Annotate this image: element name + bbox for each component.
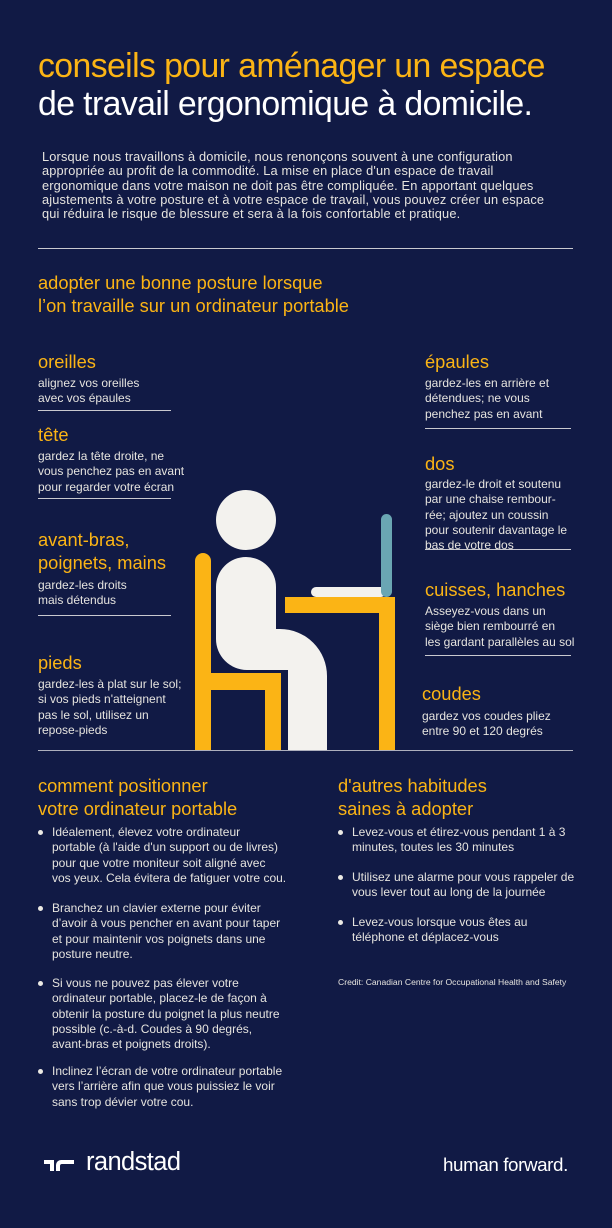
label: épaules: penchez pas en avant (425, 407, 542, 421)
label: oreilles (38, 350, 171, 411)
bullets: laptop: Inclinez l’écran de votre ordinateur portable (52, 1064, 282, 1078)
label: oreilles: oreilles (38, 351, 96, 372)
bullets: laptop: vers l’arrière afin que vous puissiez le voir (52, 1079, 275, 1093)
bullets: laptop: obtenir la posture du poignet la plus neutre (52, 1007, 280, 1021)
bullets: laptop: posture neutre. (52, 947, 133, 961)
bullets: habits: Utilisez une alarme pour vous rappeler de (352, 870, 574, 884)
bullets: habits: Levez-vous et étirez-vous pendant 1 à 3 (352, 825, 565, 839)
intro text (42, 149, 544, 221)
label: dos: pour soutenir davantage le (425, 523, 567, 537)
section heading: habits: d'autres habitudes (338, 775, 487, 796)
bullets: laptop: et pour maintenir vos poignets dans une (52, 932, 265, 946)
label: avant-bras: poignets, mains (38, 552, 166, 573)
label: tête: gardez la tête droite, ne (38, 449, 164, 463)
intro text: ergonomique dans votre maison ne doit pas être compliquée. En apportant quelques (42, 178, 533, 193)
tagline: human forward. (443, 1154, 568, 1175)
bullets: laptop: sans trop dévier votre cou. (52, 1095, 193, 1109)
bullets: habits (338, 825, 574, 944)
section heading: posture: adopter une bonne posture lorsque (38, 272, 323, 293)
label: dos: rée; ajoutez un coussin (425, 508, 548, 522)
logo: randstad: randstad (86, 1148, 180, 1176)
bullets: laptop: Branchez un clavier externe pour éviter (52, 901, 261, 915)
bullets: laptop: possible (c.-à-d. Coudes à 90 degrés, (52, 1022, 252, 1036)
intro text: qui réduira le risque de blessure et sera à la fois confortable et pratique. (42, 206, 460, 221)
bullets: laptop: Idéalement, élevez votre ordinateur (52, 825, 240, 839)
label: tête: pour regarder votre écran (38, 480, 174, 494)
bullets: laptop: portable (à l'aide d'un support ou de livres) (52, 840, 278, 854)
logo: randstad (44, 1148, 180, 1176)
credit: Credit: Canadian Centre for Occupational Health and Safety (338, 977, 566, 987)
label: pieds: pas le sol, utilisez un (38, 708, 149, 722)
label: épaules (425, 350, 571, 429)
laptop (311, 514, 392, 597)
label: épaules: épaules (425, 351, 489, 372)
chair (195, 553, 281, 750)
section heading: posture: l’on travaille sur un ordinateur portable (38, 295, 349, 316)
label: coudes: entre 90 et 120 degrés (422, 724, 543, 738)
bullets: laptop: avant-bras et poignets droits). (52, 1037, 211, 1051)
label: cuisses: Asseyez-vous dans un (425, 604, 546, 618)
title (38, 47, 545, 123)
section heading: laptop position: votre ordinateur portable (38, 798, 237, 819)
label: avant-bras: avant-bras, (38, 529, 129, 550)
bullets: laptop: ordinateur portable, placez-le de façon à (52, 991, 267, 1005)
label: oreilles: avec vos épaules (38, 391, 131, 405)
label: dos: bas de votre dos (425, 538, 514, 552)
bullets: laptop: Si vous ne pouvez pas élever votre (52, 976, 239, 990)
bullets: habits: minutes, toutes les 30 minutes (352, 840, 514, 854)
desk (285, 597, 395, 750)
label: dos: gardez-le droit et soutenu (425, 477, 561, 491)
section heading: posture (38, 272, 349, 316)
label: oreilles: alignez vos oreilles (38, 376, 139, 390)
label: coudes: coudes (422, 683, 481, 704)
section heading: laptop position: comment positionner (38, 775, 208, 796)
label: avant-bras (38, 528, 171, 616)
bullets: laptop: pour que votre moniteur soit aligné avec (52, 856, 265, 870)
bullets: habits: vous lever tout au long de la journée (352, 885, 545, 899)
title: de travail ergonomique à domicile. (38, 85, 532, 123)
section heading: habits (338, 775, 487, 819)
bullets: habits: téléphone et déplacez-vous (352, 930, 499, 944)
intro text: appropriée au profit de la commodité. La mise en place d'un espace de travail (42, 163, 493, 178)
label: cuisses: les gardant parallèles au sol (425, 635, 574, 649)
label: coudes (422, 683, 551, 738)
label: cuisses: cuisses, hanches (425, 579, 565, 600)
label: épaules: gardez-les en arrière et (425, 376, 549, 390)
label: pieds: si vos pieds n'atteignent (38, 692, 166, 706)
intro text: ajustements à votre posture et à votre espace de travail, vous pouvez créer un espace (42, 192, 544, 207)
label: dos: dos (425, 453, 454, 474)
label: tête: tête (38, 424, 68, 445)
label: dos (425, 452, 571, 550)
label: pieds: repose-pieds (38, 723, 107, 737)
section heading: laptop position (38, 775, 237, 819)
title: conseils pour aménager un espace (38, 47, 545, 85)
bullets: laptop: d’avoir à vous pencher en avant pour taper (52, 916, 280, 930)
label: coudes: gardez vos coudes pliez (422, 709, 551, 723)
label: pieds: gardez-les à plat sur le sol; (38, 677, 181, 691)
label: avant-bras: mais détendus (38, 593, 116, 607)
person (216, 490, 327, 750)
illustration: person at desk (195, 490, 395, 750)
bullets: laptop (38, 825, 286, 1109)
bullets: laptop: vos yeux. Cela évitera de fatiguer votre cou. (52, 871, 286, 885)
label: avant-bras: gardez-les droits (38, 578, 127, 592)
label: cuisses (425, 578, 571, 656)
label: dos: par une chaise rembour- (425, 492, 556, 506)
bullets: habits: Levez-vous lorsque vous êtes au (352, 915, 527, 929)
label: tête: vous penchez pas en avant (38, 464, 184, 478)
label: cuisses: siège bien rembourré en (425, 619, 555, 633)
label: pieds: pieds (38, 652, 82, 673)
label: pieds (38, 652, 181, 737)
label: tête (38, 423, 171, 499)
section heading: habits: saines à adopter (338, 798, 473, 819)
label: épaules: détendues; ne vous (425, 391, 530, 405)
intro text: Lorsque nous travaillons à domicile, nous renonçons souvent à une configuration (42, 149, 513, 164)
